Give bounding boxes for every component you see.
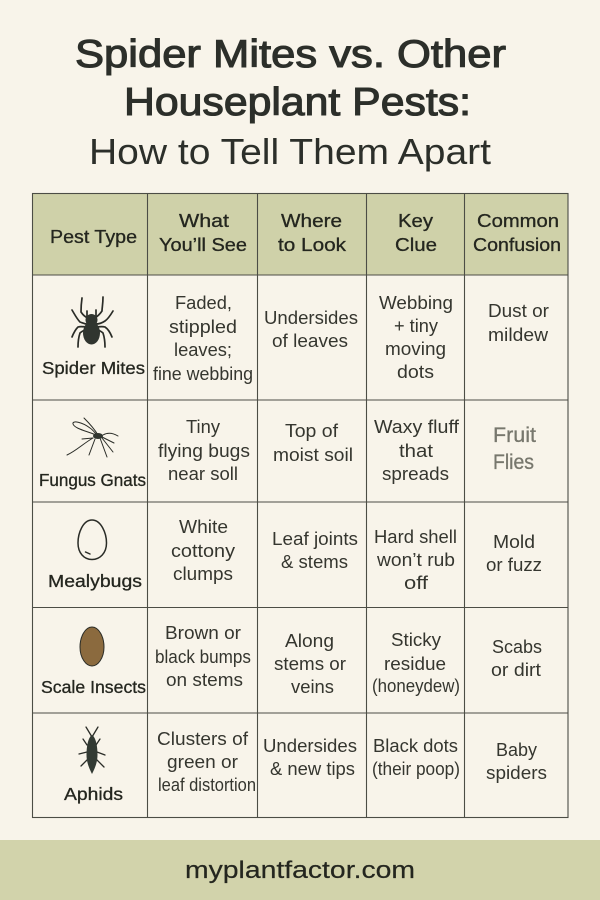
row: scale insects: Sticky — [391, 630, 441, 650]
footer band — [0, 840, 600, 900]
comparison table — [32, 193, 568, 818]
row: scale insects: residue — [384, 654, 446, 674]
row: fungus gnats: that — [399, 441, 433, 461]
row: fungus gnats: moist soil — [273, 445, 353, 465]
row: mealybugs: cottony — [171, 541, 235, 561]
subtitle: How to Tell Them Apart — [89, 131, 491, 172]
table header background — [32, 193, 568, 275]
row: aphids: Black dots — [373, 736, 458, 756]
row: spider mites: fine webbing — [153, 364, 253, 384]
icon: scale insect — [80, 627, 104, 666]
title: Spider Mites vs. Other — [75, 33, 506, 76]
row: mealybugs: & stems — [281, 552, 348, 572]
row: scale insects: on stems — [166, 670, 243, 690]
header row: Key — [398, 211, 433, 231]
row: spider mites: leaves; — [174, 340, 232, 360]
header row — [50, 211, 561, 255]
row: spider mites: Webbing — [379, 293, 453, 313]
row: scale insects: (honeydew) — [372, 676, 460, 696]
row: fungus gnats: Fungus Gnats — [39, 470, 146, 490]
row: spider mites: mildew — [488, 325, 549, 345]
row: fungus gnats: Top of — [285, 421, 339, 441]
row: spider mites: + tiny — [394, 316, 438, 336]
row: spider mites: of leaves — [272, 331, 348, 351]
row: aphids: Undersides — [263, 736, 357, 756]
header row: You’ll See — [159, 235, 247, 255]
row: scale insects: Brown or — [165, 623, 241, 643]
header row: What — [179, 211, 229, 231]
row: mealybugs: Leaf joints — [272, 529, 358, 549]
header row: to Look — [278, 235, 347, 255]
row: aphids — [64, 727, 547, 804]
header row: Pest Type — [50, 227, 137, 247]
icon: mealybug — [78, 520, 106, 560]
row: mealybugs: Mealybugs — [48, 571, 142, 591]
row: mealybugs: off — [404, 573, 429, 593]
row: aphids: (their poop) — [372, 759, 460, 779]
row: fungus gnats: Flies — [493, 451, 534, 474]
header row: Confusion — [473, 235, 561, 255]
row: aphids: Baby — [496, 740, 537, 760]
row: scale insects: veins — [291, 677, 334, 697]
row: aphids: spiders — [486, 763, 547, 783]
row: mealybugs: won’t rub — [376, 550, 455, 570]
row: aphids: Aphids — [64, 784, 123, 804]
row: aphids: & new tips — [270, 759, 355, 779]
row: fungus gnats: Tiny — [186, 417, 220, 437]
row: aphids: green or — [167, 752, 238, 772]
row: fungus gnats: Waxy fluff — [374, 417, 460, 437]
row: spider mites: Spider Mites — [42, 358, 145, 378]
row: scale insects: Scale Insects — [41, 677, 146, 697]
row: scale insects: Scabs — [492, 637, 542, 657]
icon: aphid — [79, 727, 105, 774]
title — [75, 33, 506, 172]
row: fungus gnats: spreads — [382, 464, 449, 484]
row: aphids: Clusters of — [157, 729, 249, 749]
row: scale insects: or dirt — [491, 660, 541, 680]
row: mealybugs: White — [179, 517, 228, 537]
row: scale insects: stems or — [274, 654, 346, 674]
row: spider mites: Undersides — [264, 308, 358, 328]
row: fungus gnats: Fruit — [493, 424, 536, 447]
row: spider mites: Dust or — [488, 301, 549, 321]
header row: Common — [477, 211, 559, 231]
row: mealybugs: or fuzz — [486, 555, 542, 575]
row: fungus gnats: flying bugs — [158, 441, 250, 461]
header row: Where — [281, 211, 342, 231]
row: mealybugs: clumps — [173, 564, 233, 584]
footer website: myplantfactor.com — [185, 857, 415, 884]
row: mealybugs: Mold — [493, 532, 535, 552]
row: mealybugs — [48, 517, 542, 593]
row: fungus gnats: near soll — [168, 464, 238, 484]
row: spider mites: moving — [385, 339, 446, 359]
row: spider mites: Faded, — [175, 293, 232, 313]
row: spider mites: stippled — [169, 317, 237, 337]
header row: Clue — [395, 235, 437, 255]
row: fungus gnats — [39, 417, 536, 490]
row: spider mites: dots — [397, 362, 434, 382]
row: scale insects: black bumps — [155, 647, 251, 667]
row: spider mites — [42, 293, 549, 384]
icon: gnat — [67, 418, 118, 457]
title: Houseplant Pests: — [124, 81, 471, 124]
icon: spider — [72, 297, 113, 347]
row: aphids: leaf distortion — [158, 775, 256, 795]
row: scale insects — [41, 623, 542, 697]
row: mealybugs: Hard shell — [374, 527, 457, 547]
row: scale insects: Along — [285, 631, 334, 651]
